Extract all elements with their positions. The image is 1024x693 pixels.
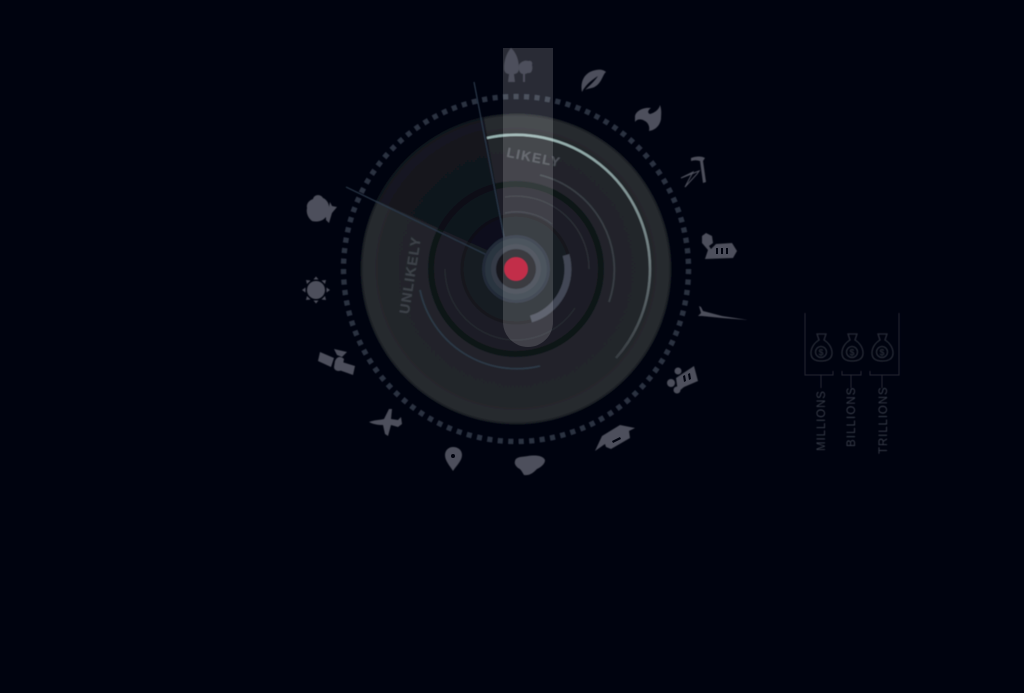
icon: eiffel tower [698, 306, 748, 320]
inner dark ring [431, 184, 601, 354]
arc: left ring [445, 269, 575, 340]
dark disk [360, 114, 672, 424]
icon: buildings [702, 233, 737, 259]
icon: tree uprooted [307, 195, 337, 223]
icon: flame [635, 105, 661, 131]
icon dark details [451, 248, 728, 458]
icon: map pin [445, 447, 462, 471]
sector: dark wedge [377, 118, 503, 250]
icon: airplane [369, 409, 402, 436]
hub ring [484, 236, 548, 302]
money bag: trillions [872, 334, 893, 361]
sector boundary line top [474, 82, 505, 242]
icon: house [595, 425, 635, 451]
hub inner ring [491, 244, 541, 294]
arc: inner short [505, 212, 552, 224]
label: trillions: TRILLIONS [878, 386, 890, 454]
arc: short thick [531, 255, 568, 319]
legend brackets [805, 313, 899, 388]
icon: sun [302, 276, 330, 304]
legend: money scale [805, 313, 899, 454]
highlight bar [503, 48, 553, 347]
money bag: millions [811, 334, 832, 361]
hub dark [496, 249, 536, 289]
house windows [612, 437, 621, 443]
money bag: trillions: $ [879, 348, 885, 358]
money bag: billions [842, 334, 863, 361]
label: unlikely: UNLIKELY [396, 235, 424, 315]
label: billions: BILLIONS [846, 386, 858, 447]
dotted outer ring [344, 96, 688, 442]
radial dial [340, 82, 692, 444]
train windows [683, 373, 691, 382]
money bag: billions: $ [849, 348, 855, 358]
arc: middle [540, 175, 614, 302]
map pin glyph [451, 454, 455, 458]
category icons [302, 48, 748, 475]
sector boundary line left [346, 187, 487, 255]
label: likely: LIKELY [505, 145, 562, 170]
arc: outer bright [487, 135, 650, 358]
infographic canvas [302, 48, 900, 476]
inner ring [462, 215, 570, 323]
icon: trees [504, 48, 532, 82]
arc: inner thin [505, 196, 589, 269]
label: millions: MILLIONS [816, 390, 828, 451]
hub red dot [504, 257, 528, 281]
icon: blob [515, 455, 545, 475]
icon: pick and compass [681, 156, 706, 187]
icon: leaf [582, 70, 606, 92]
icon: satellite [318, 349, 355, 375]
money bag: millions: $ [818, 348, 824, 358]
icon: train [667, 366, 698, 394]
arc: lower left blue [420, 290, 540, 369]
buildings windows [716, 248, 728, 254]
